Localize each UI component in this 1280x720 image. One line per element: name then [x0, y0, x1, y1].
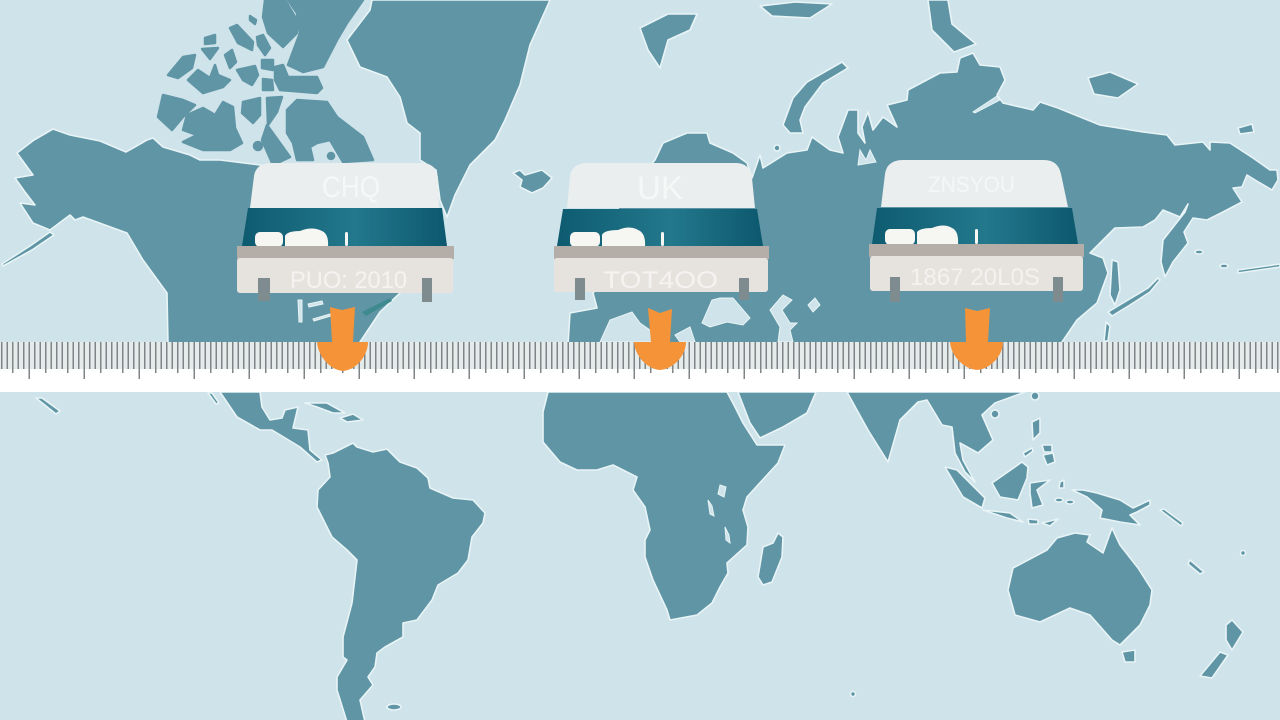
device card: UK: UK: [637, 170, 683, 206]
Arabia: [738, 392, 816, 438]
small Pacific islands: [850, 550, 1246, 696]
Australia: [1008, 528, 1152, 645]
arrow: third marker: [950, 308, 1003, 370]
Falkland islands: [387, 704, 401, 710]
device card: CHQ: [237, 163, 454, 302]
New Guinea: [1072, 490, 1150, 525]
Korea and Japan arc: [1104, 260, 1160, 341]
device card: UK: TOT4OO: [603, 267, 718, 294]
New Zealand: [1200, 620, 1243, 678]
white blobs on band: [570, 228, 664, 247]
North America: [15, 129, 440, 345]
device card: CHQ: PUO: 2010: [290, 267, 407, 294]
Svalbard: [640, 14, 697, 68]
Africa: [543, 392, 785, 620]
Tasmania: [1122, 650, 1135, 662]
Eurasia: [568, 53, 1278, 345]
Iceland: [513, 170, 552, 193]
Arctic north islands: [760, 2, 832, 18]
arrow: second marker: [634, 308, 686, 370]
Caribbean islands: [36, 393, 363, 422]
Solomon islands: [1160, 509, 1183, 526]
Greenland: [347, 0, 550, 217]
Arctic islands: [158, 0, 373, 165]
South Asia and Indochina: [847, 392, 1025, 482]
Kuril islands: [1195, 250, 1280, 273]
device card: CHQ: CHQ: [322, 171, 380, 204]
Central America: [220, 392, 322, 462]
white blobs on band: [255, 228, 348, 247]
Novaya Zemlya: [783, 62, 848, 133]
arrow: first marker: [317, 307, 368, 371]
Atlantic coast streaks: [362, 298, 392, 316]
Madagascar: [758, 533, 783, 585]
device card: third: [869, 160, 1084, 302]
device card: third: 1867 20L0S: [910, 264, 1040, 291]
Indonesia and Philippines: [945, 392, 1074, 526]
South America: [317, 443, 485, 720]
ruler: [0, 342, 1280, 392]
Aleutian islands: [2, 232, 54, 266]
lakes, inland seas and channels: [298, 96, 1000, 543]
device card: UK: [554, 163, 769, 300]
device card: third: ZNSYOU: [928, 172, 1015, 197]
white blobs on band: [885, 226, 978, 245]
